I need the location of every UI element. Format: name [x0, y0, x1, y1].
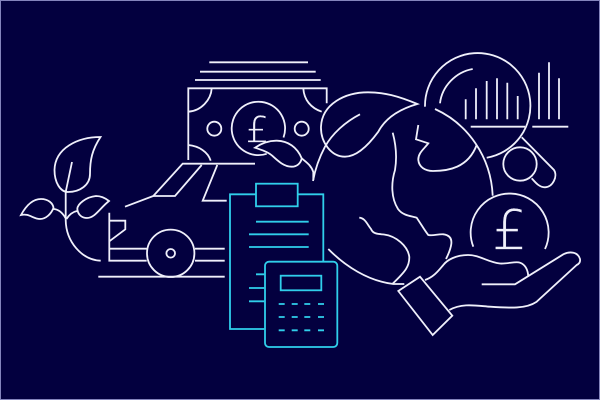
text: pound sign on banknote: £ [246, 110, 269, 151]
icon: calculator [265, 262, 337, 347]
icon: small leaf on banknote [255, 141, 313, 180]
icon: clipboard [230, 184, 323, 329]
icon: magnifying glass with bar chart [425, 53, 568, 187]
text: pound sign on coin: £ [492, 199, 527, 262]
icon: car [98, 164, 255, 277]
icon: plant [21, 137, 109, 261]
icon: hand [398, 252, 580, 335]
icon: large leaf [313, 92, 417, 181]
icon: pound coin [471, 194, 549, 262]
icon: banknote [188, 62, 327, 161]
icon: globe [328, 109, 493, 284]
bar chart [466, 62, 559, 119]
